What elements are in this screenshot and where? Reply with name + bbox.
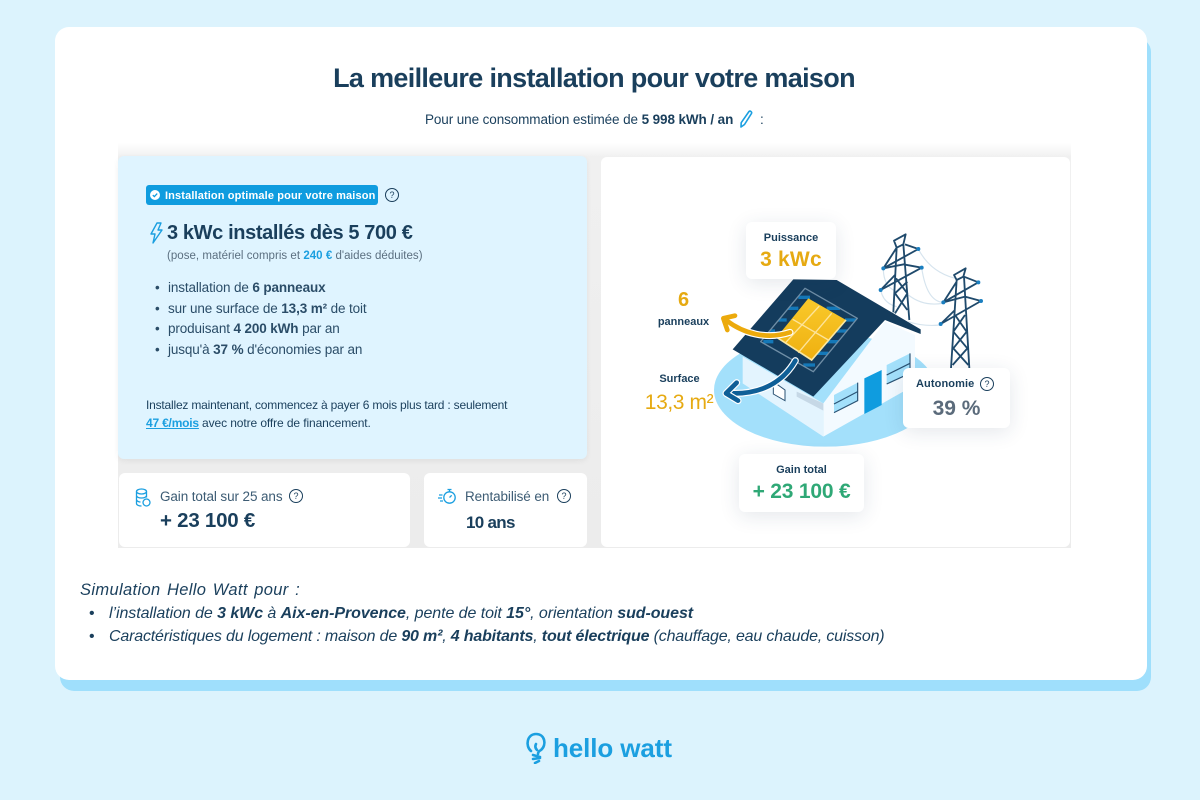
- icon: help badge: [385, 188, 399, 202]
- bullet list: jusqu'à 37 % d'économies par an: [168, 342, 362, 357]
- financing text: [146, 398, 508, 430]
- badge: [146, 185, 378, 205]
- bullet list: produisant 4 200 kWh par an: [168, 321, 340, 336]
- bullet list: sur une surface de 13,3 m² de toit: [168, 301, 367, 316]
- solar panel: [777, 298, 846, 360]
- label: panels count: 6: [678, 289, 689, 311]
- simulation notes: •: [89, 628, 95, 645]
- callout: total gain: Gain total: [776, 464, 827, 476]
- label: surface: [645, 373, 714, 414]
- illustration: house and pylons: [714, 233, 983, 447]
- back card shadow: [60, 38, 1151, 691]
- house walls: [743, 322, 915, 437]
- bullet list: installation de 6 panneaux: [168, 280, 325, 295]
- callout: total gain: + 23 100 €: [753, 480, 850, 503]
- icon: coins: [136, 488, 151, 507]
- power lines: [881, 249, 955, 325]
- callout: power: [746, 222, 836, 279]
- icon: help: [289, 489, 303, 503]
- pylon insulators: [879, 247, 983, 326]
- icon: help: [557, 489, 571, 503]
- simulation notes: •: [89, 605, 95, 622]
- label: surface: 13,3 m²: [645, 391, 713, 414]
- bullet list: •: [155, 301, 160, 316]
- value: 10 ans: [466, 513, 515, 532]
- arrow: panels: [723, 316, 790, 336]
- callout: power: Puissance: [764, 232, 818, 244]
- callout: total gain: [739, 454, 864, 512]
- label: panels count: panneaux: [658, 316, 709, 328]
- panel: optimal installation: [118, 156, 587, 459]
- financing text: 47 €/mois avec notre offre de financement.: [146, 416, 371, 430]
- icon: lightning: [150, 222, 163, 244]
- arrow: surface: [726, 361, 795, 401]
- heading: price: 3 kWc installés dès 5 700 €: [167, 222, 412, 244]
- panel: comparison background: [118, 143, 1071, 548]
- bullet list: [155, 280, 367, 357]
- label: Rentabilisé en: [465, 489, 549, 504]
- panel stripes: [763, 297, 857, 365]
- financing text: Installez maintenant, commencez à payer 6 mois plus tard : seulement: [146, 398, 507, 412]
- panel: illustration: [601, 157, 1070, 547]
- badge: Installation optimale pour votre maison: [165, 190, 375, 202]
- callout: autonomy: ?: [984, 379, 990, 389]
- front windows: [834, 353, 910, 413]
- panel: payback: [424, 473, 587, 547]
- side window: [773, 382, 785, 401]
- ground ellipse: [714, 333, 936, 447]
- callout: autonomy: Autonomie: [916, 378, 974, 390]
- logo: hello watt: [526, 732, 672, 764]
- simulation notes: Simulation Hello Watt pour :: [80, 581, 300, 599]
- icon: pencil: [740, 110, 752, 128]
- main white card: [55, 27, 1147, 680]
- subtitle: Pour une consommation estimée de 5 998 kWh / an: [425, 112, 733, 127]
- label: panels count: [658, 289, 709, 328]
- bullet list: •: [155, 342, 160, 357]
- bullet list: •: [155, 321, 160, 336]
- callout: power: 3 kWc: [760, 248, 822, 271]
- simulation notes: [80, 581, 884, 645]
- simulation notes: Caractéristiques du logement : maison de 90 m², 4 habitants, tout électrique (chauffage, eau chaude, cuisson): [109, 628, 884, 645]
- value: + 23 100 €: [160, 509, 255, 532]
- wordmark: hello watt: [553, 733, 672, 763]
- panel: total gain: [119, 473, 410, 547]
- icon: check: [150, 190, 160, 200]
- bullet list: •: [155, 280, 160, 295]
- callout: autonomy: 39 %: [933, 397, 980, 420]
- roof: [733, 279, 921, 397]
- right pylon: [941, 268, 981, 368]
- left pylon: [881, 234, 922, 320]
- icon: help: ?: [293, 491, 298, 501]
- icon: stopwatch: [438, 488, 456, 504]
- door: [864, 370, 882, 414]
- label: surface: Surface: [659, 373, 700, 385]
- label: Gain total sur 25 ans: [160, 489, 282, 504]
- icon: bulb: [526, 732, 546, 764]
- callout: autonomy: [903, 368, 1010, 428]
- subtitle: :: [760, 112, 764, 127]
- note: (pose, matériel compris et 240 € d'aides déduites): [167, 250, 423, 262]
- icon: help: ?: [561, 491, 566, 501]
- panel frame: [761, 288, 857, 372]
- icon: help badge: ?: [389, 190, 394, 200]
- title: La meilleure installation pour votre maison: [333, 63, 855, 93]
- simulation notes: l’installation de 3 kWc à Aix-en-Provence, pente de toit 15°, orientation sud-ouest: [109, 605, 693, 622]
